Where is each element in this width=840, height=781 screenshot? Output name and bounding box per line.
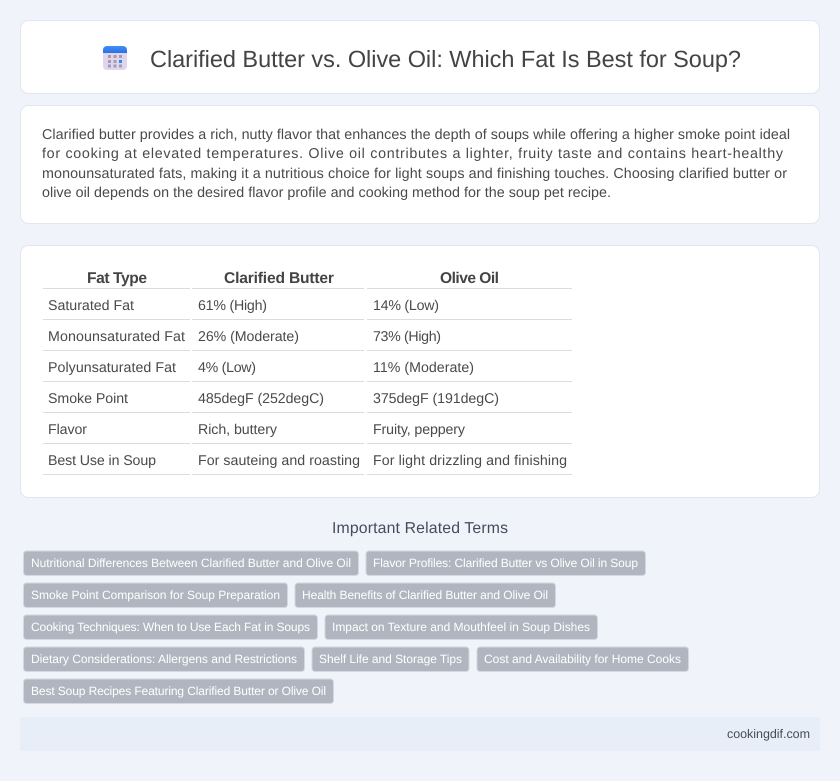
intro text: Clarified butter provides a rich, nutty flavor that enhances the depth of soups while offering a higher smoke point ideal xyxy=(42,127,790,143)
row: saturated fat: 14% (Low) xyxy=(373,298,439,314)
tag: texture and mouthfeel xyxy=(325,615,598,640)
tag: cost and availability xyxy=(477,647,688,672)
tag: shelf life: Shelf Life and Storage Tips xyxy=(319,652,462,666)
header card xyxy=(20,20,820,94)
table header row: Clarified Butter xyxy=(224,270,334,287)
row: best use in soup: For sauteing and roasting xyxy=(198,453,360,469)
tag: cost and availability: Cost and Availability for Home Cooks xyxy=(484,652,681,666)
table card xyxy=(20,246,820,498)
row: monounsaturated fat xyxy=(48,329,441,345)
row: monounsaturated fat: Monounsaturated Fat xyxy=(48,329,185,345)
tag: smoke point: Smoke Point Comparison for Soup Preparation xyxy=(31,588,280,602)
row: flavor xyxy=(48,422,466,438)
row: saturated fat: Saturated Fat xyxy=(48,298,134,314)
tag: health benefits xyxy=(295,583,556,608)
tag: best soup recipes: Best Soup Recipes Featuring Clarified Butter or Olive Oil xyxy=(31,684,326,698)
row: flavor: Flavor xyxy=(48,422,87,438)
related terms tags xyxy=(24,551,688,704)
row: best use in soup xyxy=(48,453,567,469)
header panel xyxy=(20,20,820,94)
section heading: related terms: Important Related Terms xyxy=(332,520,508,537)
tag: flavor profiles: Flavor Profiles: Clarified Butter vs Olive Oil in Soup xyxy=(373,556,638,570)
table header row: Olive Oil xyxy=(440,270,499,287)
row: smoke point xyxy=(48,391,499,407)
tag: best soup recipes xyxy=(24,679,334,704)
row: polyunsaturated fat: 11% (Moderate) xyxy=(373,360,474,376)
tag: shelf life xyxy=(312,647,469,672)
intro text: for cooking at elevated temperatures. Olive oil contributes a lighter, fruity taste and contains heart-healthy xyxy=(42,146,784,162)
footer bar xyxy=(20,717,820,751)
tag: cooking techniques xyxy=(24,615,318,640)
row: polyunsaturated fat xyxy=(48,360,474,376)
intro card xyxy=(20,106,820,224)
tag: dietary considerations: Dietary Considerations: Allergens and Restrictions xyxy=(31,652,297,666)
intro text: monounsaturated fats, making it a nutritious choice for light soups and finishing touches. Choosing clarified butter or xyxy=(42,166,787,182)
intro text xyxy=(42,127,790,201)
row: best use in soup: For light drizzling and finishing xyxy=(373,453,567,469)
title: Clarified Butter vs. Olive Oil: Which Fat Is Best for Soup? xyxy=(150,46,741,72)
tag: cooking techniques: Cooking Techniques: When to Use Each Fat in Soups xyxy=(31,620,310,634)
row: monounsaturated fat: 26% (Moderate) xyxy=(198,329,299,345)
table rules xyxy=(43,288,572,475)
panel: intro paragraph xyxy=(20,106,820,224)
tag: texture and mouthfeel: Impact on Texture and Mouthfeel in Soup Dishes xyxy=(332,620,590,634)
tag: health benefits: Health Benefits of Clarified Butter and Olive Oil xyxy=(302,588,548,602)
row: flavor: Fruity, peppery xyxy=(373,422,466,438)
row: smoke point: Smoke Point xyxy=(48,391,128,407)
row: polyunsaturated fat: Polyunsaturated Fat xyxy=(48,360,176,376)
panel: comparison table xyxy=(20,246,820,498)
intro text: olive oil depends on the desired flavor profile and cooking method for the soup pet recipe. xyxy=(42,185,611,201)
tag: smoke point xyxy=(24,583,288,608)
row: saturated fat: 61% (High) xyxy=(198,298,267,314)
row: monounsaturated fat: 73% (High) xyxy=(373,329,441,345)
table header row xyxy=(87,270,499,287)
row: smoke point: 375degF (191degC) xyxy=(373,391,499,407)
row: polyunsaturated fat: 4% (Low) xyxy=(198,360,256,376)
row: flavor: Rich, buttery xyxy=(198,422,278,438)
tag: nutritional differences: Nutritional Differences Between Clarified Butter and Olive Oil xyxy=(31,556,351,570)
icon: calendar xyxy=(103,46,127,70)
row: best use in soup: Best Use in Soup xyxy=(48,453,156,469)
table header row: Fat Type xyxy=(87,270,147,287)
footer source text: cookingdif.com xyxy=(727,727,810,741)
tag: dietary considerations xyxy=(24,647,304,672)
tag: nutritional differences xyxy=(24,551,358,576)
tag: flavor profiles xyxy=(366,551,646,576)
row: saturated fat xyxy=(48,298,439,314)
row: smoke point: 485degF (252degC) xyxy=(198,391,324,407)
